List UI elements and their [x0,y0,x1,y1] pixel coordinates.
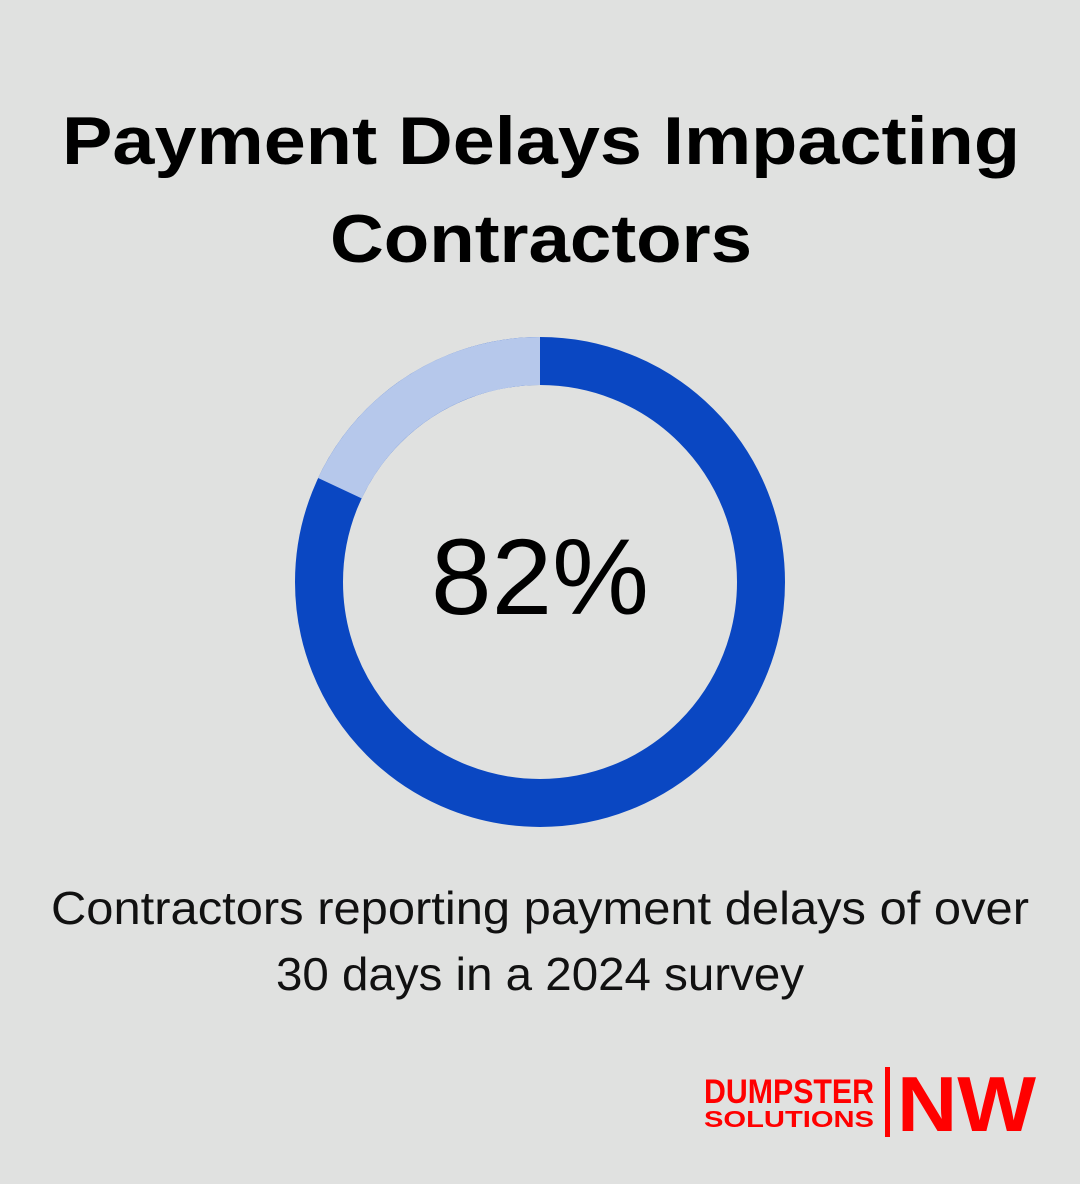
logo [704,1060,1036,1148]
subtitle: 30 days in a 2024 survey [276,948,804,1000]
subtitle: Contractors reporting payment delays of over [51,882,1029,934]
subtitle [51,882,1029,1000]
logo: SOLUTIONS [704,1106,874,1132]
title: Payment Delays Impacting [62,103,1020,179]
donut chart [319,361,761,803]
logo: DUMPSTER [704,1073,874,1111]
title: Contractors [330,201,752,277]
title [62,103,1020,277]
logo: NW [897,1060,1036,1148]
percentage value: 82% [431,516,649,637]
